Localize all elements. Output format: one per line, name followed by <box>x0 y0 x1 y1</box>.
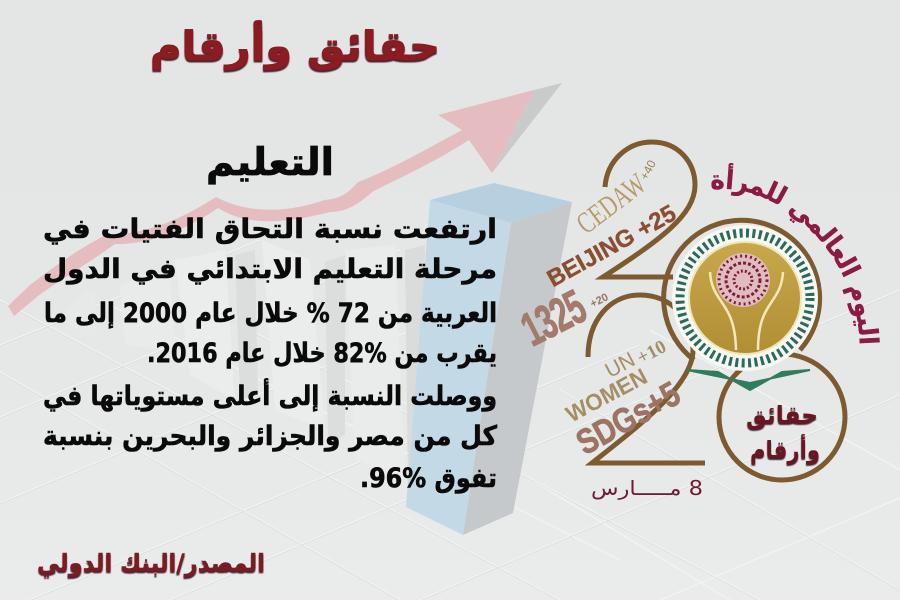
logo: SDGs+5 label: SDGs+5 <box>570 374 687 463</box>
body text block: كل من مصر والجزائر والبحرين بنسبة <box>43 421 497 452</box>
logo: UN label: UN <box>601 348 639 383</box>
emblem gold disc <box>689 242 801 354</box>
logo: +40 label: +40 <box>637 157 659 182</box>
logo: 1325 label: 1325 <box>513 280 594 357</box>
background faded bars <box>60 240 425 490</box>
background floor grid <box>0 240 900 600</box>
emblem calligraphy disc <box>716 253 770 307</box>
logo: facts and figures text: وأرقام <box>750 434 820 464</box>
body text block: مرحلة التعليم الابتدائي في الدول <box>43 254 497 285</box>
body text block: العربية من 72 % خلال عام 2000 إلى ما <box>44 298 497 329</box>
logo: facts and figures text: حقائق <box>746 401 818 429</box>
logo: curved event title: اليوم العالمي للمرأة <box>711 163 880 344</box>
logo: 2020 numerals <box>588 142 845 480</box>
emblem book base <box>687 370 810 390</box>
logo: +20 label: +20 <box>588 291 610 310</box>
title: حقائق وأرقام <box>150 20 440 70</box>
logo: facts and figures text <box>746 401 820 464</box>
body text block: يقرب من %82 خلال عام 2016. <box>147 338 497 369</box>
body text block <box>43 214 497 494</box>
logo: BEIJING +25 label: BEIJING +25 <box>543 200 681 293</box>
body text block: ارتفعت نسبة التحاق الفتيات في <box>43 214 497 245</box>
section heading: التعليم <box>206 140 334 185</box>
logo: emblem <box>672 225 818 390</box>
background rising arrow <box>8 83 562 316</box>
emblem wreath <box>680 233 810 363</box>
logo: +10 label: +10 <box>634 336 670 369</box>
body text block: ووصلت النسبة إلى أعلى مستوياتها في <box>43 378 497 412</box>
background blue 3D bar <box>406 183 572 535</box>
logo: CEDAW label: CEDAW <box>570 167 653 241</box>
source note: المصدر/البنك الدولي <box>37 549 265 577</box>
emblem hands figure <box>710 272 783 350</box>
logo: March 8 label: 8 مـــــارس <box>591 476 703 500</box>
body text block: تفوق %96. <box>360 463 497 494</box>
logo: WOMEN label: WOMEN <box>562 363 651 427</box>
